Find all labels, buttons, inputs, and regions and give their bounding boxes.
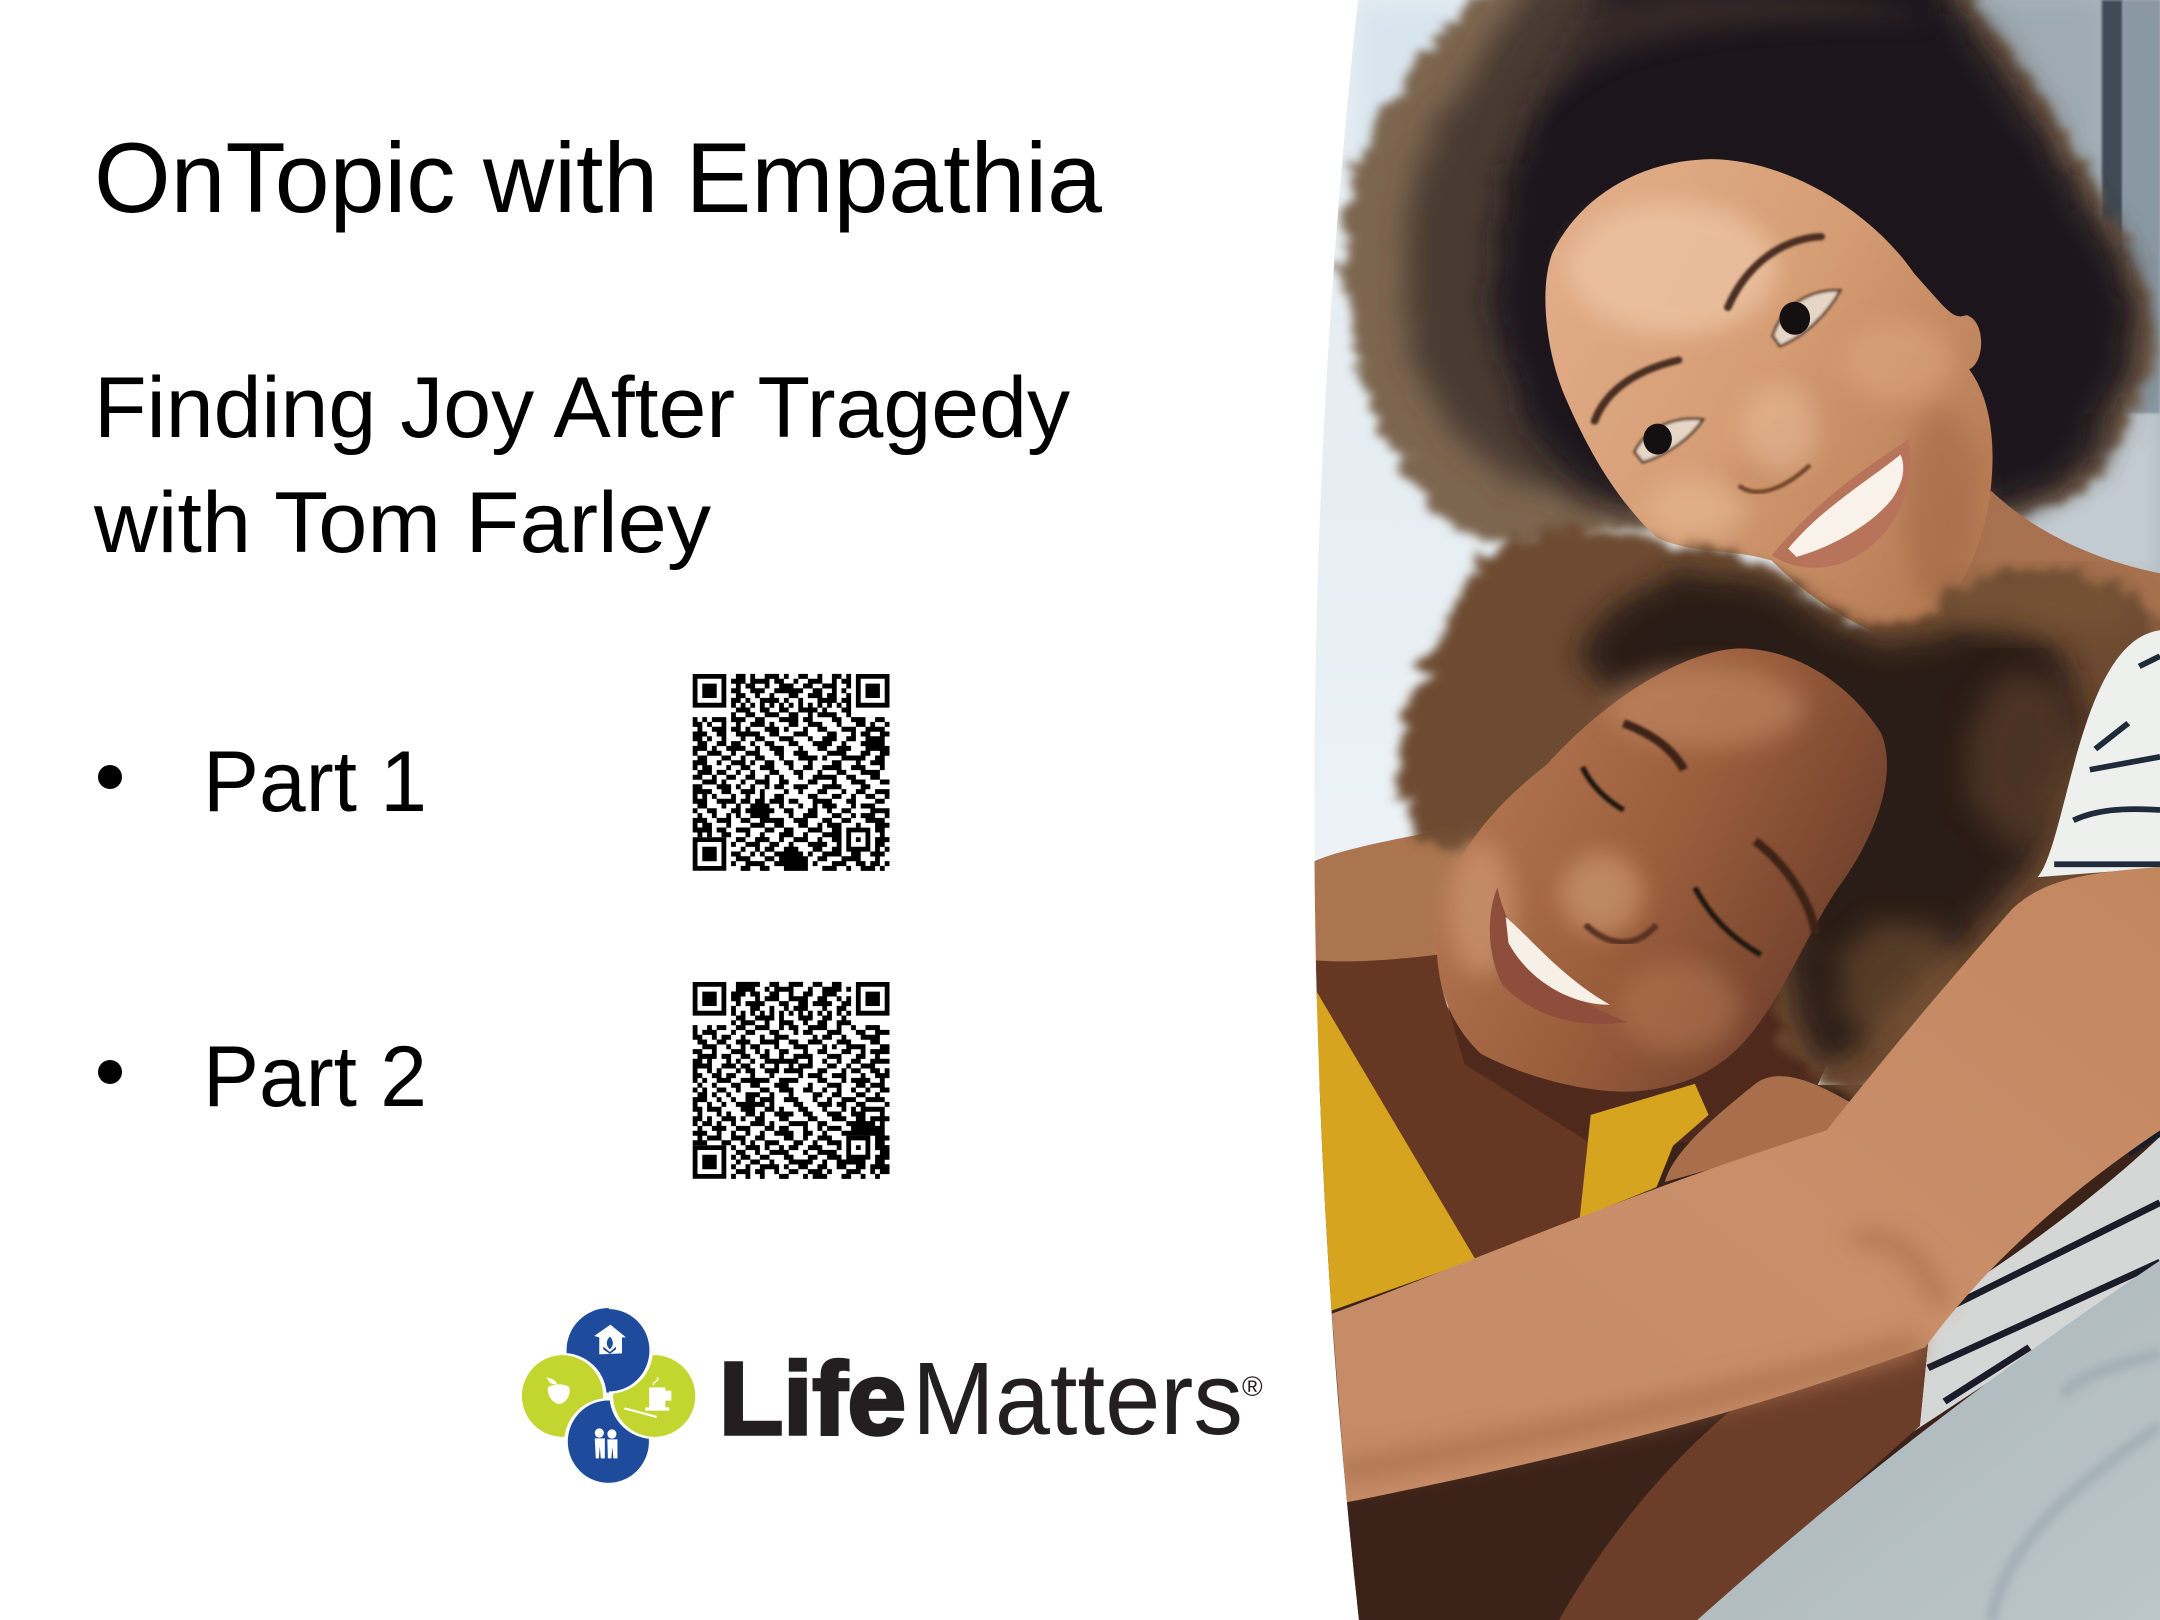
logo wordmark: Life — [719, 1341, 906, 1456]
window background — [1314, 0, 2160, 1084]
subtitle — [93, 360, 1070, 571]
LifeMatters logo — [520, 1308, 1263, 1484]
mother's smile — [1772, 439, 1911, 568]
logo wordmark: Matters — [912, 1341, 1243, 1456]
mother's arm — [1332, 867, 2160, 1502]
bullet item: Part 1 — [98, 734, 427, 830]
child's nose — [1561, 852, 1643, 935]
child's closed eyes and brows — [1582, 767, 1761, 955]
mother's left eye — [1635, 419, 1703, 462]
grey trousers — [1695, 1261, 2160, 1620]
child's back arm — [1314, 833, 1475, 974]
mother's face — [1545, 159, 1993, 639]
title: OnTopic with Empathia — [94, 122, 1103, 233]
lower base shadow — [1300, 1085, 2160, 1620]
mother's nose — [1733, 398, 1836, 493]
QR code: Part 1 — [693, 674, 890, 871]
child's face — [1437, 648, 1887, 1092]
child's smile — [1490, 888, 1626, 1024]
child's hair — [1396, 528, 2160, 1099]
child's chest — [1311, 955, 1596, 1261]
lower dark arm area — [1338, 1343, 1928, 1620]
bullet item: Part 2 — [98, 1029, 427, 1125]
child's neck — [1448, 987, 1826, 1142]
child's yellow shirt — [1314, 987, 1709, 1311]
child's hand — [1665, 1076, 1854, 1182]
mother's hair — [1344, 0, 2151, 544]
logo wordmark — [719, 1341, 1263, 1456]
subtitle: Finding Joy After Tragedy — [94, 360, 1070, 456]
photo: mother hugging daughter, curved left edge — [1300, 0, 2160, 1620]
logo wordmark: ® — [1242, 1371, 1263, 1402]
logo mark: pinwheel — [520, 1308, 697, 1484]
bullet item: Part 2: Part 2 — [203, 1029, 427, 1125]
bullet item: Part 1: Part 1 — [203, 734, 427, 830]
QR code: Part 2 — [693, 982, 890, 1179]
mother's striped shirt — [1914, 630, 2160, 1431]
subtitle: with Tom Farley — [93, 475, 711, 571]
mother's eyebrows — [1728, 237, 1821, 307]
mother's neck — [1930, 490, 2160, 634]
mother's right eye — [1773, 290, 1840, 346]
